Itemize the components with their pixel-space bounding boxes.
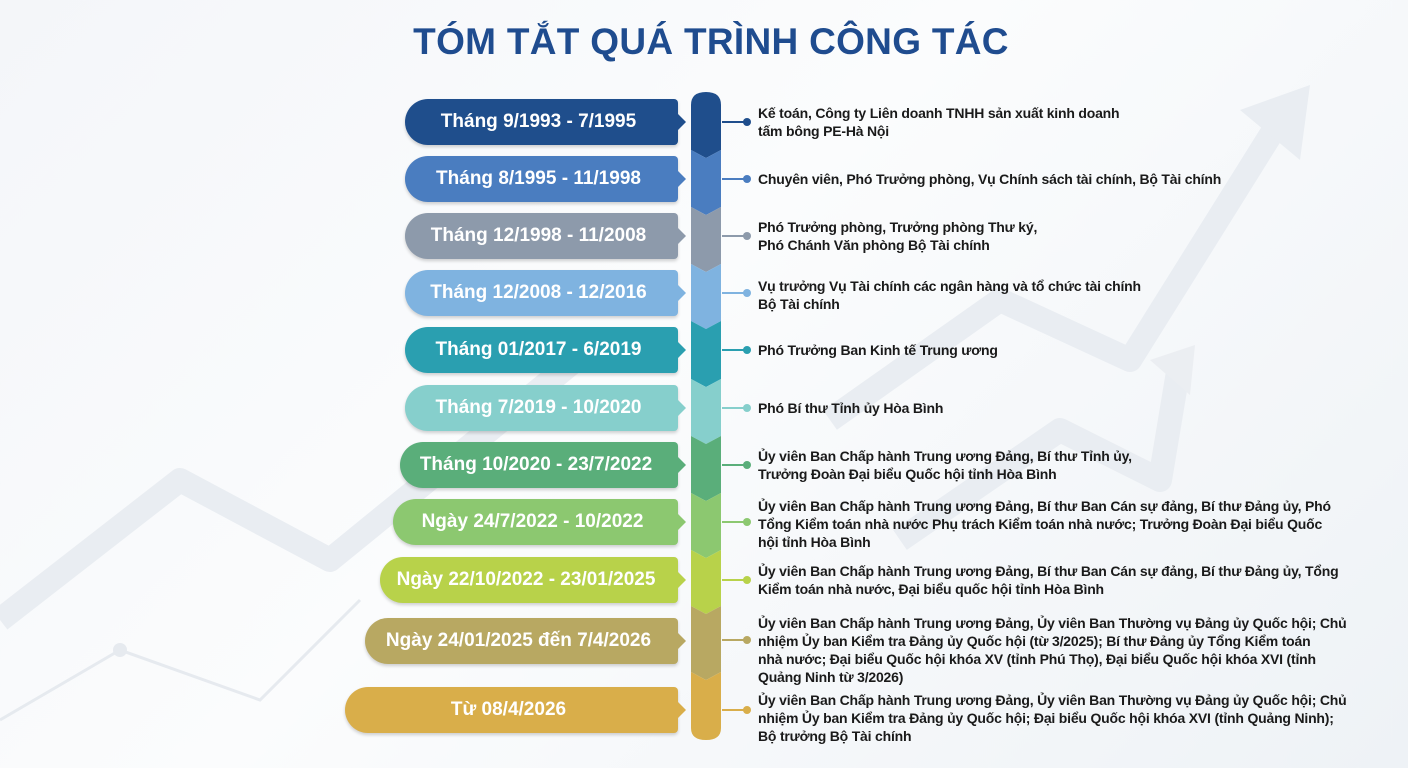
text: Ủy viên Ban Chấp hành Trung ương Đảng, Bí thư Ban Cán sự đảng, Bí thư Đảng ủy, Phó xyxy=(758,498,1331,514)
text: Tổng Kiểm toán nhà nước Phụ trách Kiểm toán nhà nước; Trưởng Đoàn Đại biểu Quốc xyxy=(758,516,1322,532)
row 6 xyxy=(405,385,678,431)
text: Chuyên viên, Phó Trưởng phòng, Vụ Chính sách tài chính, Bộ Tài chính xyxy=(758,171,1221,187)
text: Phó Bí thư Tỉnh ủy Hòa Bình xyxy=(758,400,943,416)
row 2 xyxy=(405,156,678,202)
text: Bộ Tài chính xyxy=(758,296,840,312)
title: TÓM TẮT QUÁ TRÌNH CÔNG TÁC xyxy=(413,21,1009,62)
text: nhiệm Ủy ban Kiểm tra Đảng ủy Quốc hội (từ 3/2025); Bí thư Đảng ủy Tổng Kiểm toán xyxy=(758,633,1310,649)
row 3: Tháng 12/1998 - 11/2008 xyxy=(431,225,646,246)
text: Quảng Ninh từ 3/2026) xyxy=(758,669,903,685)
row 11 xyxy=(345,687,678,733)
row 4 xyxy=(405,270,678,316)
row 8 xyxy=(393,499,678,545)
text: Bộ trưởng Bộ Tài chính xyxy=(758,728,911,744)
row 1: Tháng 9/1993 - 7/1995 xyxy=(441,111,636,132)
row 11: Từ 08/4/2026 xyxy=(451,699,566,720)
row 2: Tháng 8/1995 - 11/1998 xyxy=(436,168,641,189)
row 10: Ngày 24/01/2025 đến 7/4/2026 xyxy=(386,630,651,651)
row 8: Ngày 24/7/2022 - 10/2022 xyxy=(422,511,643,532)
row 9 xyxy=(380,557,678,603)
row 6: Tháng 7/2019 - 10/2020 xyxy=(436,397,641,418)
text: Ủy viên Ban Chấp hành Trung ương Đảng, Bí thư Ban Cán sự đảng, Bí thư Đảng ủy, Tổng xyxy=(758,563,1338,579)
text: Ủy viên Ban Chấp hành Trung ương Đảng, Bí thư Tỉnh ủy, xyxy=(758,448,1132,464)
text: tấm bông PE-Hà Nội xyxy=(758,123,889,139)
text: nhà nước; Đại biểu Quốc hội khóa XV (tỉnh Phú Thọ), Đại biểu Quốc hội khóa XVI (tỉnh xyxy=(758,651,1316,667)
row 5: Tháng 01/2017 - 6/2019 xyxy=(436,339,641,360)
row 3 xyxy=(405,213,678,259)
text: Ủy viên Ban Chấp hành Trung ương Đảng, Ủy viên Ban Thường vụ Đảng ủy Quốc hội; Chủ xyxy=(758,692,1346,708)
text: Ủy viên Ban Chấp hành Trung ương Đảng, Ủy viên Ban Thường vụ Đảng ủy Quốc hội; Chủ xyxy=(758,615,1346,631)
row 10 xyxy=(365,618,678,664)
row 7: Tháng 10/2020 - 23/7/2022 xyxy=(420,454,652,475)
text: Trưởng Đoàn Đại biểu Quốc hội tỉnh Hòa Bình xyxy=(758,466,1056,482)
row 1 xyxy=(405,99,678,145)
text: Phó Trưởng phòng, Trưởng phòng Thư ký, xyxy=(758,219,1037,235)
text: hội tỉnh Hòa Bình xyxy=(758,534,870,550)
text: Vụ trưởng Vụ Tài chính các ngân hàng và tổ chức tài chính xyxy=(758,278,1141,294)
row 7 xyxy=(400,442,678,488)
text: Phó Chánh Văn phòng Bộ Tài chính xyxy=(758,237,990,253)
row 5 xyxy=(405,327,678,373)
text: Kiểm toán nhà nước, Đại biểu quốc hội tỉnh Hòa Bình xyxy=(758,581,1104,597)
text: nhiệm Ủy ban Kiểm tra Đảng ủy Quốc hội; Đại biểu Quốc hội khóa XVI (tỉnh Quảng Ninh); xyxy=(758,710,1334,726)
text: Kế toán, Công ty Liên doanh TNHH sản xuất kinh doanh xyxy=(758,105,1119,121)
row 9: Ngày 22/10/2022 - 23/01/2025 xyxy=(397,569,655,590)
row 4: Tháng 12/2008 - 12/2016 xyxy=(430,282,647,303)
text: Phó Trưởng Ban Kinh tế Trung ương xyxy=(758,342,998,358)
